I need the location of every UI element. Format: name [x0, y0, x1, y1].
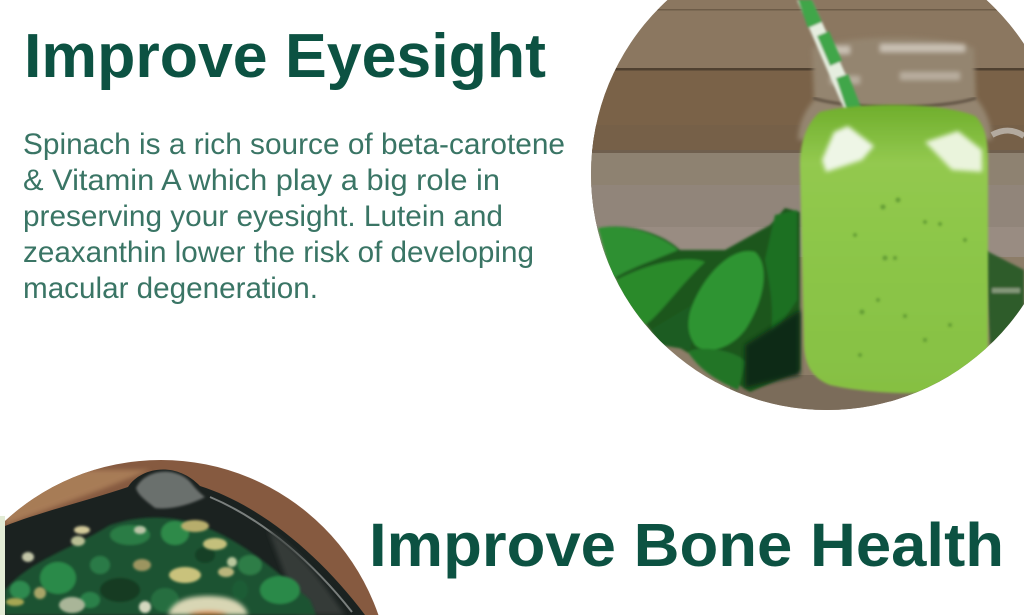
glass jar rim and neck	[798, 38, 992, 140]
pan rim highlight	[210, 497, 352, 612]
cast iron pan	[5, 469, 365, 615]
text block: eyesight description: macular degeneration.	[23, 272, 318, 305]
panel: eyesight section	[23, 22, 565, 305]
text block: eyesight description: zeaxanthin lower the risk of developing	[23, 236, 534, 269]
spinach leaves	[598, 208, 1024, 392]
jar glare highlights	[822, 126, 982, 172]
photo: spinach and egg in cast iron skillet	[5, 460, 378, 615]
wood plank background	[591, 0, 1024, 410]
green straw	[797, 0, 864, 118]
text block: eyesight description: preserving your eyesight. Lutein and	[23, 200, 503, 233]
text block: eyesight description	[23, 128, 565, 305]
smoothie flecks	[853, 198, 967, 357]
egg and onion pieces	[6, 520, 237, 613]
fried egg	[168, 596, 248, 615]
heading: Improve Bone Health: Improve Bone Health	[369, 511, 1004, 579]
smoothie filling jar	[800, 105, 988, 393]
pan inner shading	[268, 530, 345, 615]
pale strip at left edge	[0, 516, 5, 615]
pan handle loop	[136, 472, 205, 508]
text block: eyesight description: & Vitamin A which play a big role in	[23, 164, 500, 197]
jar handle	[992, 131, 1024, 136]
circular crop of smoothie photo	[591, 0, 1024, 410]
spinach filling	[5, 518, 316, 615]
heading: Improve Eyesight: Improve Eyesight	[24, 22, 546, 91]
table light patch	[5, 470, 150, 525]
photo: green spinach smoothie in mason jar	[591, 0, 1024, 410]
wooden table	[5, 460, 380, 615]
text block: eyesight description: Spinach is a rich source of beta-carotene	[23, 128, 565, 161]
leaf shadow	[745, 310, 800, 388]
